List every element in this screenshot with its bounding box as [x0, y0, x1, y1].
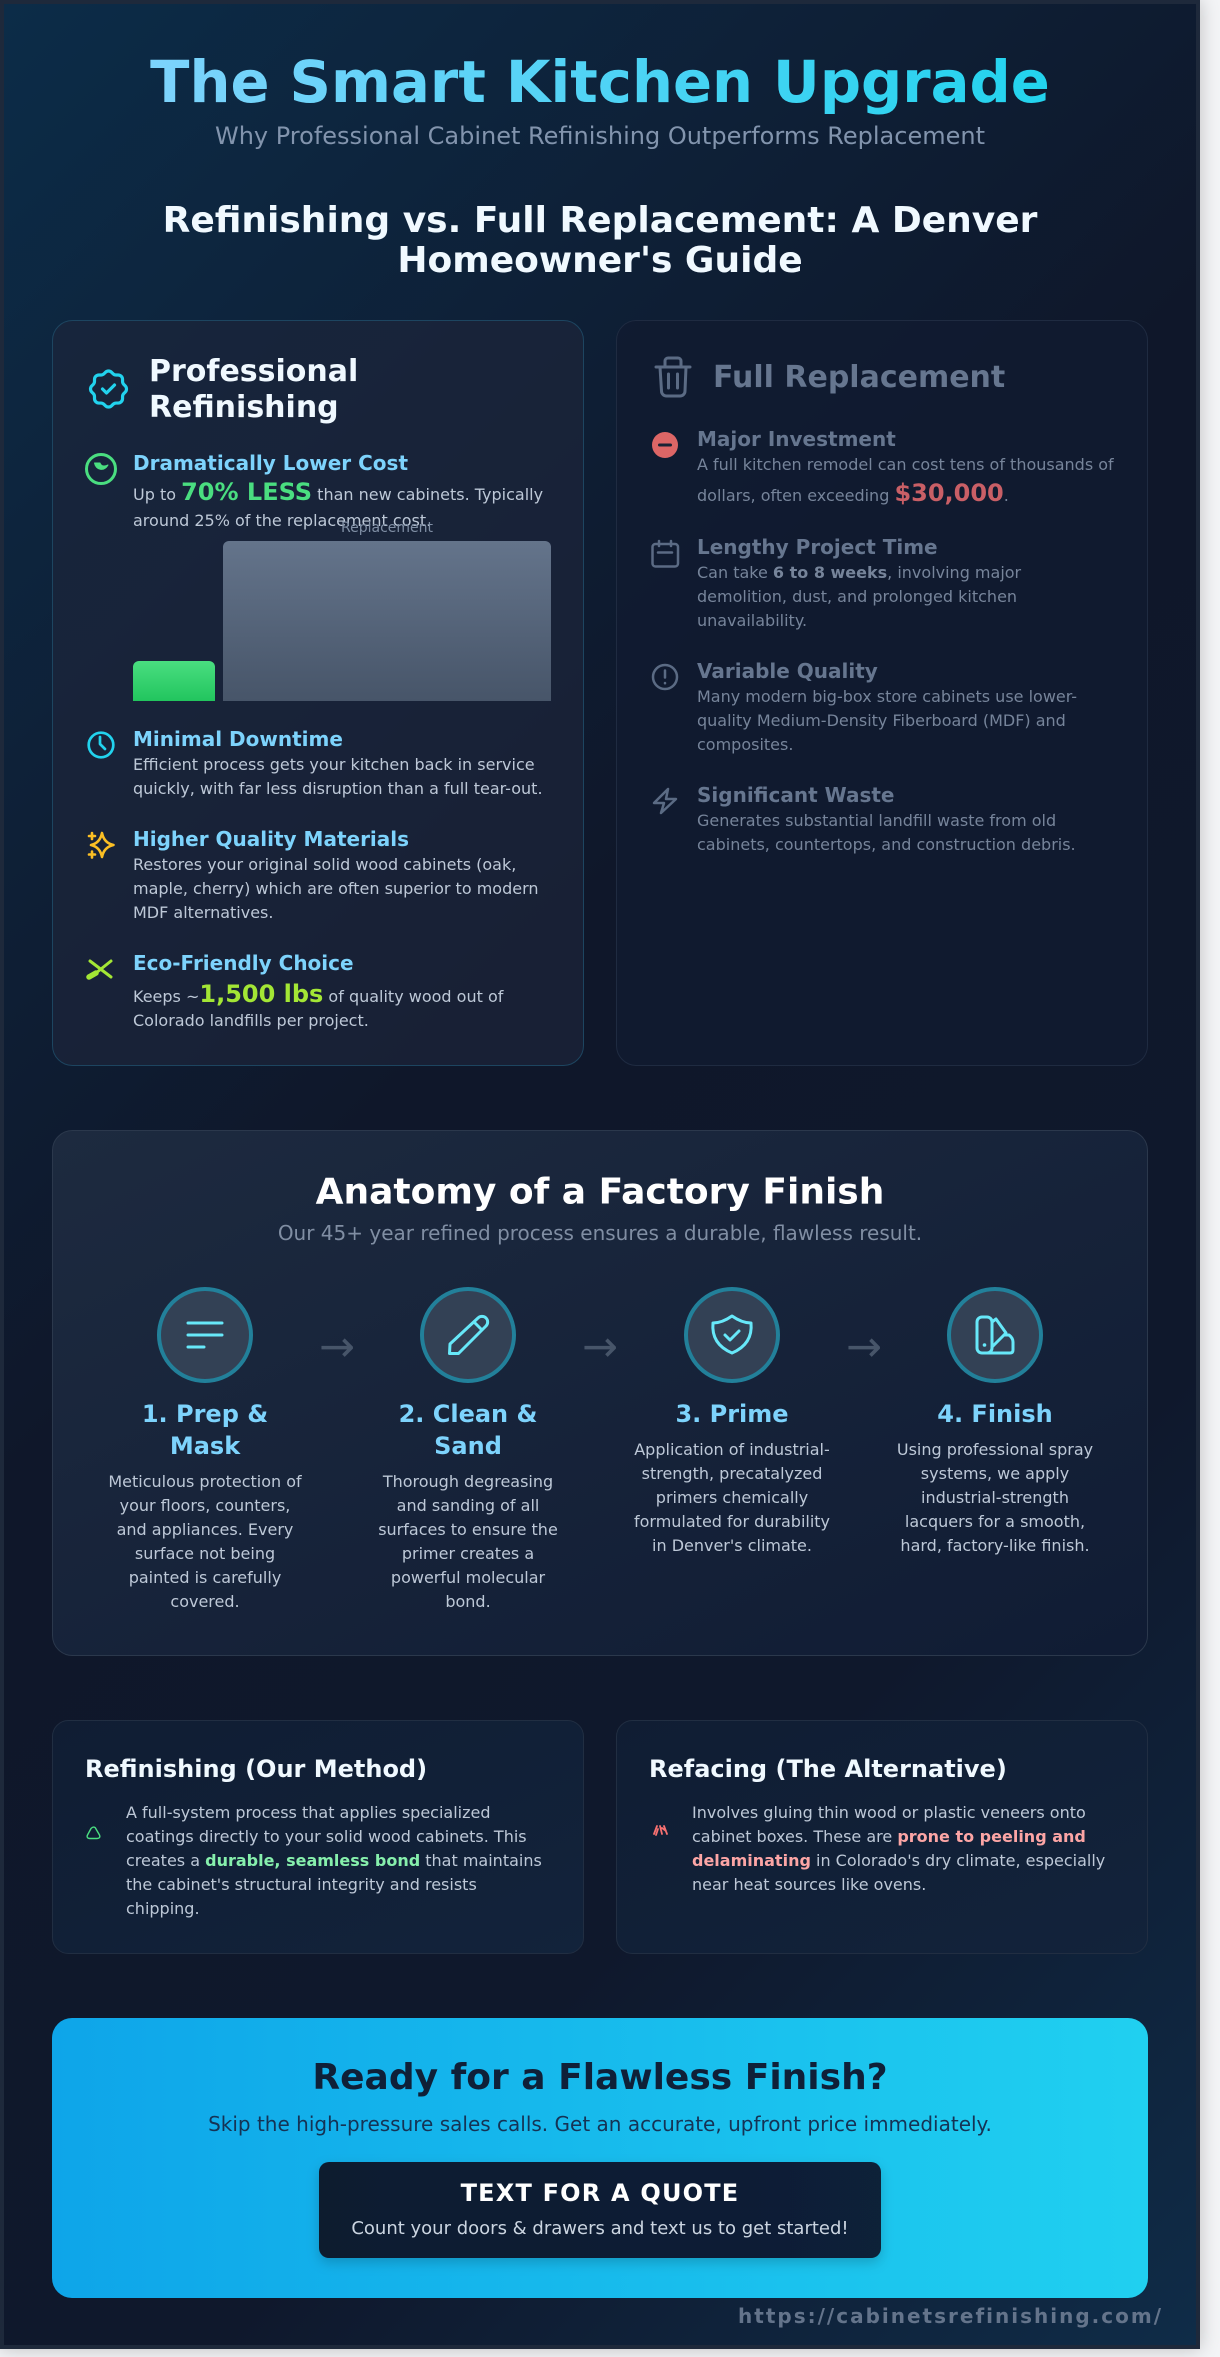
item: downtime: [89, 727, 543, 798]
icon: clock: [89, 733, 113, 757]
panel text: the cabinet's structural integrity and resists: [126, 1875, 477, 1894]
icon: trash: [656, 358, 690, 396]
step text: strength, precatalyzed: [642, 1464, 822, 1483]
item: lower cost: [86, 451, 543, 530]
cta heading: Ready for a Flawless Finish?: [312, 2057, 888, 2098]
panel heading: Refinishing (Our Method): [85, 1755, 427, 1783]
item text: quickly, with far less disruption than a full tear-out.: [133, 779, 543, 798]
icon: minus circle: [652, 432, 678, 458]
section heading: Homeowner's Guide: [397, 240, 803, 281]
step text: Thorough degreasing: [382, 1472, 553, 1491]
step text: surfaces to ensure the: [378, 1520, 558, 1539]
step text: industrial-strength: [921, 1488, 1069, 1507]
panel: anatomy of a factory finish: [52, 1130, 1148, 1656]
step 2: [378, 1289, 558, 1611]
step title: 1. Prep &: [142, 1400, 268, 1428]
item text: Efficient process gets your kitchen back in service: [133, 755, 535, 774]
section heading: Refinishing vs. Full Replacement: A Denver: [163, 200, 1038, 241]
item text: Generates substantial landfill waste from old: [697, 811, 1056, 830]
panel: professional refinishing: [52, 320, 584, 1066]
icon: pencil: [422, 1289, 514, 1381]
step title: 3. Prime: [675, 1400, 789, 1428]
step title: 2. Clean &: [399, 1400, 537, 1428]
item text: $30,000.: [894, 479, 1009, 507]
panel text: cabinet boxes. These are: [692, 1827, 897, 1846]
item text: A full kitchen remodel can cost tens of thousands of: [697, 455, 1114, 474]
icon: smile circle: [86, 454, 116, 484]
item title: Minimal Downtime: [133, 727, 343, 751]
step 4: [897, 1289, 1093, 1555]
panel text: prone to peeling and: [897, 1827, 1086, 1846]
step 1: [108, 1289, 302, 1611]
item title: Significant Waste: [697, 783, 894, 807]
icon: sparkles: [89, 833, 114, 858]
arrow: →: [319, 1322, 355, 1372]
step title: Mask: [170, 1432, 241, 1460]
icon: bolt: [654, 789, 676, 813]
item: time: [652, 535, 1022, 630]
item text: demolition, dust, and prolonged kitchen: [697, 587, 1017, 606]
item title: Higher Quality Materials: [133, 827, 409, 851]
panel text: near heat sources like ovens.: [692, 1875, 926, 1894]
panel: call to action: [52, 2018, 1148, 2298]
panel text: A full-system process that applies specialized: [126, 1803, 490, 1822]
step text: formulated for durability: [634, 1512, 830, 1531]
cta text: Skip the high-pressure sales calls. Get an accurate, upfront price immediately.: [208, 2112, 992, 2136]
item text: 1,500 lbs of quality wood out of: [199, 980, 503, 1008]
panel text: chipping.: [126, 1899, 200, 1918]
panel heading: Refinishing: [149, 390, 339, 425]
step text: Meticulous protection of: [108, 1472, 302, 1491]
bar label: Replacement: [341, 520, 434, 536]
icon: crossed tools: [89, 961, 111, 977]
item title: Eco-Friendly Choice: [133, 951, 354, 975]
panel text: creates a: [126, 1851, 205, 1870]
step title: 4. Finish: [937, 1400, 1053, 1428]
icon: exclamation circle: [653, 665, 677, 689]
step text: lacquers for a smooth,: [905, 1512, 1085, 1531]
cta button: [319, 2162, 881, 2258]
button label: TEXT FOR A QUOTE: [461, 2179, 739, 2207]
step text: Using professional spray: [897, 1440, 1093, 1459]
panel text: delaminating: [692, 1851, 811, 1870]
bar: refinishing: [133, 661, 215, 701]
item: materials: [89, 827, 539, 922]
icon: swatch: [949, 1289, 1041, 1381]
step text: your floors, counters,: [120, 1496, 290, 1515]
item text: Restores your original solid wood cabinets (oak,: [133, 855, 516, 874]
step text: surface not being: [135, 1544, 275, 1563]
item: quality: [653, 659, 1077, 754]
item text: composites.: [697, 735, 793, 754]
item text: Many modern big-box store cabinets use lower-: [697, 687, 1077, 706]
icon: badge check: [91, 371, 127, 407]
arrow: →: [582, 1322, 618, 1372]
step 3: [634, 1289, 830, 1555]
item text: around 25% of the replacement cost.: [133, 511, 431, 530]
panel: refinishing method: [52, 1720, 584, 1954]
item: waste: [654, 783, 1076, 854]
panel text: durable, seamless bond that maintains: [205, 1851, 542, 1870]
panel text: in Colorado's dry climate, especially: [811, 1851, 1105, 1870]
panel subtitle: Our 45+ year refined process ensures a durable, flawless result.: [278, 1221, 922, 1245]
step text: Application of industrial-: [634, 1440, 830, 1459]
step text: hard, factory-like finish.: [900, 1536, 1090, 1555]
item text: Keeps ~: [133, 987, 199, 1006]
panel: refacing alternative: [616, 1720, 1148, 1954]
step text: covered.: [170, 1592, 240, 1611]
item text: dollars, often exceeding: [697, 486, 894, 505]
step text: bond.: [445, 1592, 491, 1611]
icon: filter lines: [159, 1289, 251, 1381]
panel: full replacement: [616, 320, 1148, 1066]
subtitle: Why Professional Cabinet Refinishing Outperforms Replacement: [215, 122, 985, 150]
panel heading: Full Replacement: [713, 360, 1005, 395]
icon: calendar: [652, 541, 678, 566]
item text: maple, cherry) which are often superior to modern: [133, 879, 539, 898]
step text: primers chemically: [656, 1488, 808, 1507]
footer url: https://cabinetsrefinishing.com/: [738, 2304, 1163, 2328]
item title: Major Investment: [697, 427, 896, 451]
step text: primer creates a: [402, 1544, 534, 1563]
arrow: →: [846, 1322, 882, 1372]
step text: systems, we apply: [921, 1464, 1069, 1483]
button sub-label: Count your doors & drawers and text us to get started!: [351, 2218, 849, 2239]
item text: 6 to 8 weeks, involving major: [773, 563, 1021, 582]
title: The Smart Kitchen Upgrade: [150, 49, 1050, 116]
item text: unavailability.: [697, 611, 807, 630]
step text: and sanding of all: [397, 1496, 539, 1515]
bar: replacement: [223, 541, 551, 701]
step text: in Denver's climate.: [652, 1536, 812, 1555]
header: [150, 49, 1050, 150]
panel text: Involves gluing thin wood or plastic veneers onto: [692, 1803, 1086, 1822]
step text: painted is carefully: [129, 1568, 281, 1587]
item: eco: [89, 951, 504, 1030]
item text: Colorado landfills per project.: [133, 1011, 369, 1030]
bar chart: cost comparison: [133, 520, 551, 701]
icon: shield check: [686, 1289, 778, 1381]
step title: Sand: [434, 1432, 502, 1460]
panel text: coatings directly to your solid wood cabinets. This: [126, 1827, 527, 1846]
item text: Can take: [697, 563, 773, 582]
item: investment: [652, 427, 1114, 507]
item text: quality Medium-Density Fiberboard (MDF) and: [697, 711, 1066, 730]
item text: 70% LESS than new cabinets. Typically: [181, 478, 543, 506]
panel heading: Refacing (The Alternative): [649, 1755, 1007, 1783]
icon: broken link: [654, 1826, 667, 1835]
item title: Dramatically Lower Cost: [133, 451, 408, 475]
item title: Variable Quality: [697, 659, 878, 683]
item text: Up to: [133, 485, 181, 504]
item text: cabinets, countertops, and construction debris.: [697, 835, 1076, 854]
item text: MDF alternatives.: [133, 903, 273, 922]
step text: and appliances. Every: [117, 1520, 293, 1539]
item title: Lengthy Project Time: [697, 535, 938, 559]
step text: powerful molecular: [391, 1568, 546, 1587]
icon: cloud: [87, 1827, 100, 1838]
panel heading: Professional: [149, 354, 358, 389]
panel heading: Anatomy of a Factory Finish: [316, 1172, 884, 1212]
